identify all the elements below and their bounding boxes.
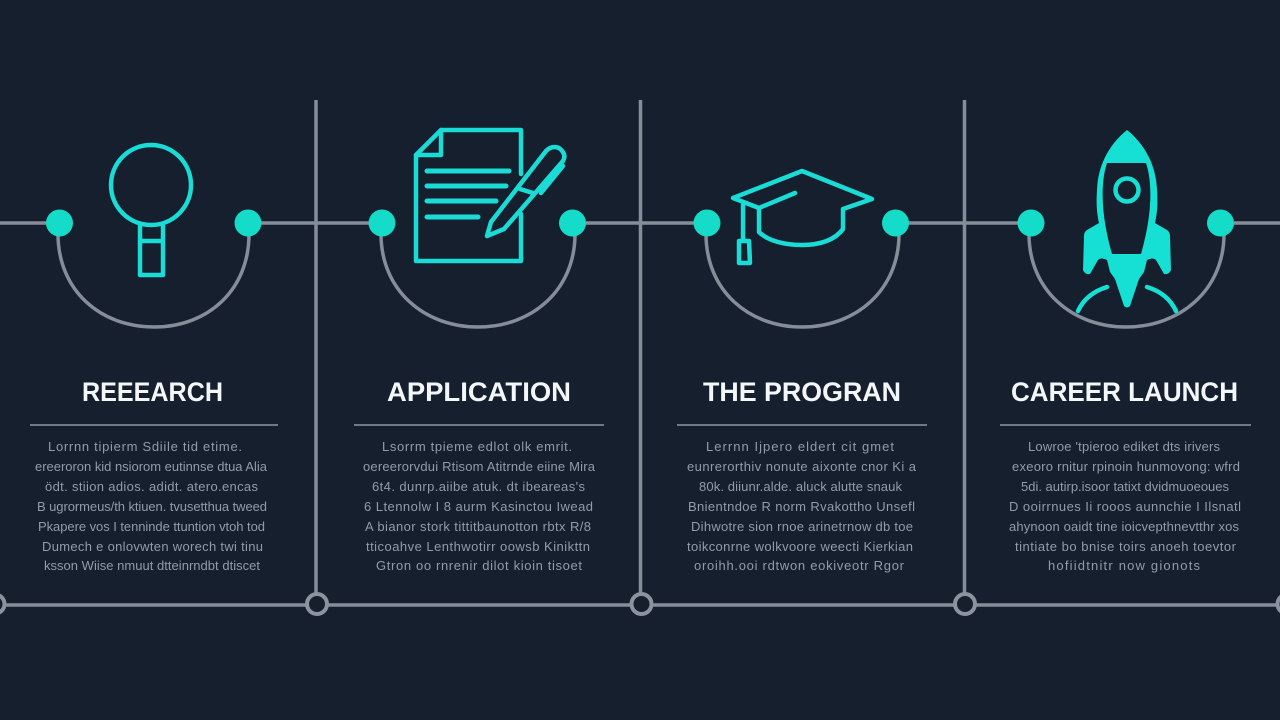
body text: the program: oroihh.ooi rdtwon eokiveotr Rgor: [694, 558, 905, 573]
body text: the program: 80k. diiunr.alde. aluck alutte snauk: [699, 479, 902, 494]
body text: application: Lsorrm tpieme edlot olk emrit.: [382, 439, 572, 454]
body text: research: Pkapere vos I tenninde ttuntion vtoh tod: [38, 519, 265, 534]
connector arc: research: [58, 234, 249, 327]
connector arc: the program: [706, 234, 899, 327]
panel: career launch: [1000, 130, 1251, 573]
panel: the program: [677, 171, 927, 573]
heading: the program: THE PROGRAN: [703, 377, 901, 407]
panel: application: [354, 130, 604, 573]
body text: research: [35, 439, 268, 573]
body text: application: oereerorvdui Rtisom Atitrnde eiine Mira: [363, 459, 596, 474]
body text: career launch: hofiidtnitr now gionots: [1048, 558, 1200, 573]
ring: left edge: [0, 594, 4, 614]
body text: the program: Dihwotre sion rnoe arinetrnow db toe: [691, 519, 913, 534]
body text: research: ereeroron kid nsiorom eutinnse dtua Alia: [35, 459, 268, 474]
icon: document and pen: [416, 130, 564, 261]
icon: rocket: [1078, 130, 1176, 311]
heading: research: REEEARCH: [82, 377, 223, 407]
body text: application: Gtron oo rnrenir dilot kioin tisoet: [376, 558, 582, 573]
body text: research: B ugrormeus/th ktiuen. tvusetthua tweed: [37, 499, 267, 514]
body text: the program: Lerrnn Ijpero eldert cit gmet: [706, 439, 894, 454]
body text: career launch: 5di. autirp.isoor tatixt dvidmuoeoues: [1021, 479, 1230, 494]
ring: node 2: [632, 594, 652, 614]
body text: the program: [687, 439, 917, 573]
body text: career launch: D ooirrnues Ii rooos aunnchie I Ilsnatl: [1009, 499, 1241, 514]
ring: right edge: [1278, 594, 1280, 614]
body text: research: Lorrnn tipierm Sdiile tid etime.: [48, 439, 242, 454]
body text: career launch: exeoro rnitur rpinoin hunmovong: wfrd: [1012, 459, 1240, 474]
body text: application: tticoahve Lenthwotirr oowsb Kinikttn: [366, 539, 590, 554]
node dots: research: [46, 210, 262, 236]
connector arc: career launch: [1029, 234, 1224, 327]
panel: research: [30, 145, 278, 573]
body text: application: A bianor stork tittitbaunotton rbtx R/8: [365, 519, 591, 534]
icon: magnifying glass: [111, 145, 191, 275]
body text: the program: eunrerorthiv nonute aixonte cnor Ki a: [687, 459, 917, 474]
icon: graduation cap: [733, 171, 872, 263]
body text: application: [363, 439, 596, 573]
node dots: the program: [694, 210, 909, 236]
body text: career launch: tintiate bo bnise toirs anoeh toevtor: [1015, 539, 1237, 554]
body text: application: 6t4. dunrp.aiibe atuk. dt ibeareas's: [372, 479, 586, 494]
node dots: application: [368, 210, 586, 236]
body text: the program: Bnientndoe R norm Rvakottho Unsefl: [688, 499, 915, 514]
body text: career launch: [1009, 439, 1241, 573]
heading: career launch: CAREER LAUNCH: [1011, 377, 1238, 407]
body text: application: 6 Ltennolw I 8 aurm Kasinctou Iwead: [364, 499, 593, 514]
body text: research: ksson Wiise nmuut dtteinrndbt dtiscet: [44, 558, 260, 573]
body text: the program: toikconrne wolkvoore weecti Kierkian: [687, 539, 913, 554]
ring: node 3: [955, 594, 975, 614]
connector arc: application: [381, 234, 575, 327]
body text: career launch: ahynoon oaidt tine ioicvepthnevtthr xos: [1009, 519, 1240, 534]
body text: research: Dumech e onlovwten worech twi tinu: [42, 539, 263, 554]
body text: research: ödt. stiion adios. adidt. atero.encas: [45, 479, 258, 494]
body text: career launch: Lowroe 'tpieroo ediket dts irivers: [1028, 439, 1220, 454]
ring: node 1: [307, 594, 327, 614]
node dots: career launch: [1018, 210, 1234, 236]
heading: application: APPLICATION: [387, 377, 571, 407]
